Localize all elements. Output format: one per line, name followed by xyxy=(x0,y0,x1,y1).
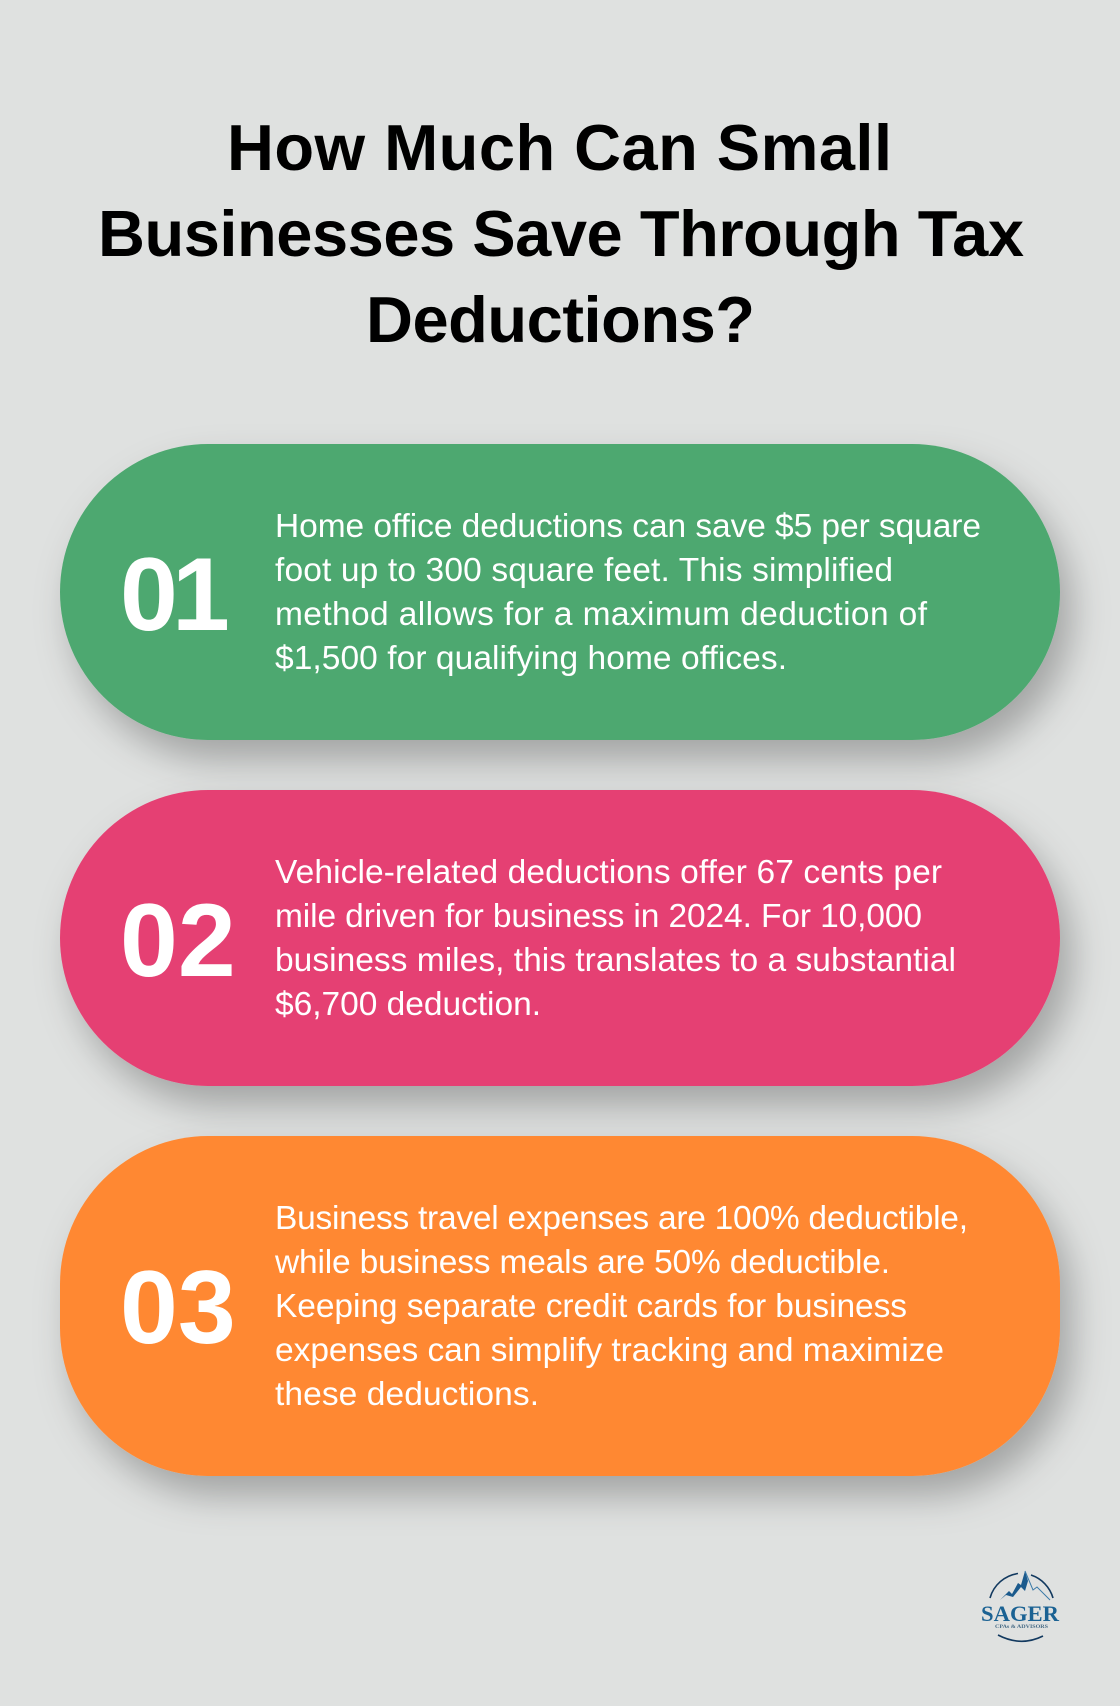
icon: Sager logo xyxy=(981,1571,1060,1641)
number 01: 01 xyxy=(120,537,230,653)
number 02: 02 xyxy=(120,883,236,999)
title: How Much Can Small xyxy=(227,111,892,184)
text block: vehicle: business miles, this translates to a substantial xyxy=(275,942,956,979)
text block: vehicle xyxy=(275,854,956,1023)
text block: vehicle: Vehicle-related deductions offer 67 cents per xyxy=(275,854,942,891)
text block: home office: $1,500 for qualifying home offices. xyxy=(275,640,787,677)
text block: home office: foot up to 300 square feet. This simplified xyxy=(275,552,893,589)
title: Deductions? xyxy=(366,283,755,356)
text block: home office: Home office deductions can save $5 per square xyxy=(275,508,981,545)
text block: travel: expenses can simplify tracking and maximize xyxy=(275,1332,944,1369)
title: Businesses Save Through Tax xyxy=(98,197,1024,270)
text block: travel: these deductions. xyxy=(275,1376,539,1413)
panel: vehicle deductions xyxy=(60,790,1060,1086)
number 03: 03 xyxy=(120,1250,236,1366)
text block: vehicle: mile driven for business in 2024. For 10,000 xyxy=(275,898,922,935)
text block: home office: method allows for a maximum deduction of xyxy=(275,596,928,633)
text block: vehicle: $6,700 deduction. xyxy=(275,986,541,1023)
text block: home office xyxy=(275,508,981,677)
panel: travel and meals xyxy=(60,1136,1060,1476)
panel: home office deductions xyxy=(60,444,1060,740)
title xyxy=(98,111,1024,356)
text block: travel: Business travel expenses are 100% deductible, xyxy=(275,1200,968,1237)
icon: Sager logo: CPAs & ADVISORS xyxy=(995,1624,1048,1630)
icon: Sager logo: SAGER xyxy=(981,1601,1060,1626)
text block: travel xyxy=(274,1200,968,1413)
text block: travel: Keeping separate credit cards for business xyxy=(275,1288,907,1325)
text block: travel: while business meals are 50% deductible. xyxy=(274,1244,890,1281)
